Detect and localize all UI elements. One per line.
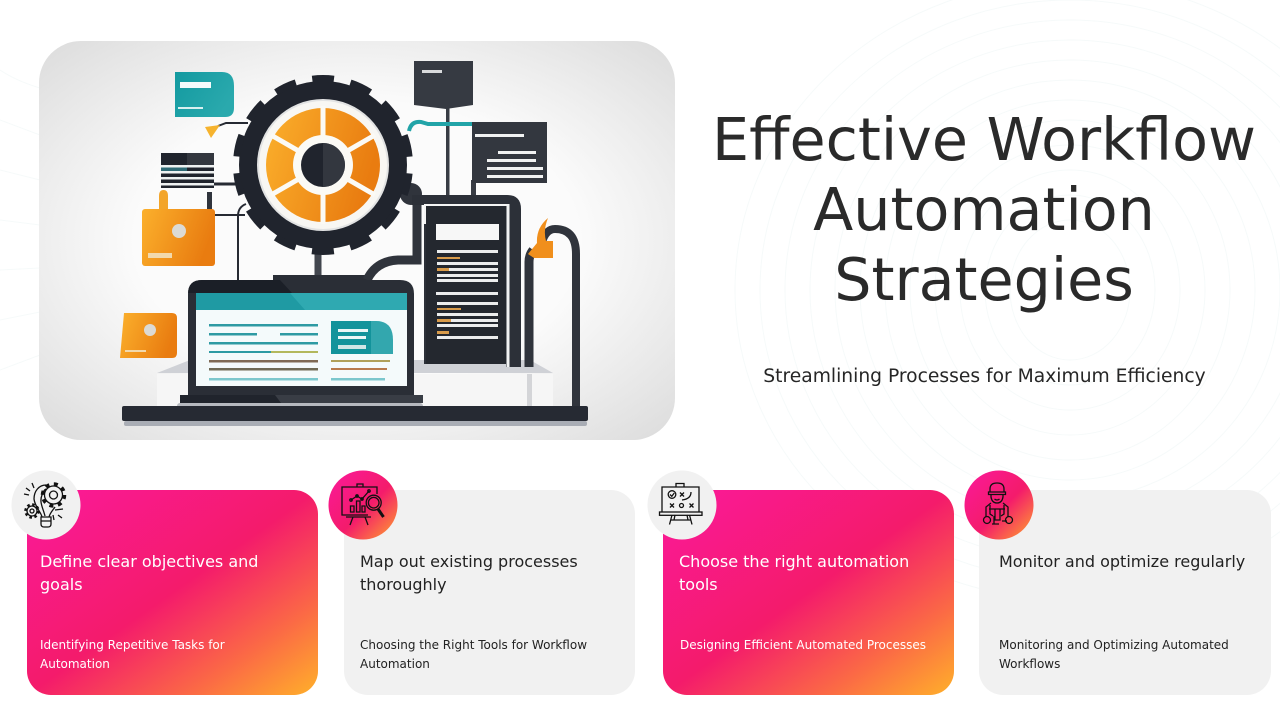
title: Automation — [813, 176, 1155, 244]
description — [360, 638, 587, 671]
dark document with stem — [414, 61, 473, 197]
right pipe with orange valve — [528, 218, 576, 406]
description: Identifying Repetitive Tasks for — [40, 638, 225, 652]
description: Automation — [360, 657, 430, 671]
icon: small orange card — [120, 313, 177, 358]
heading: Map out existing processes — [360, 552, 578, 571]
description — [40, 638, 225, 671]
icon: teal message card — [175, 72, 234, 138]
heading: Define clear objectives and — [40, 552, 258, 571]
panel: workflow illustration — [39, 41, 675, 440]
description: Monitoring and Optimizing Automated — [999, 638, 1229, 652]
icon: presentation board with magnifier — [328, 470, 398, 540]
heading: goals — [40, 575, 83, 594]
title: Strategies — [834, 246, 1134, 314]
icon: lightbulb with gears — [12, 470, 80, 540]
heading — [360, 552, 578, 594]
icon: strategy easel — [648, 470, 716, 540]
server tower — [412, 195, 521, 367]
panel: card 2 — [328, 470, 635, 695]
heading: thoroughly — [360, 575, 447, 594]
connector lines — [207, 123, 422, 283]
description — [999, 638, 1229, 671]
title — [712, 106, 1256, 314]
heading: Choose the right automation — [679, 552, 909, 571]
heading — [679, 552, 909, 594]
panel: card 3 — [648, 470, 954, 695]
icon: construction worker — [964, 470, 1034, 540]
platform — [157, 360, 553, 407]
dark document with text lines — [471, 122, 547, 196]
description: Workflows — [999, 657, 1060, 671]
description: Designing Efficient Automated Processes — [680, 638, 926, 652]
description: Choosing the Right Tools for Workflow — [360, 638, 587, 652]
desk — [122, 406, 588, 426]
laptop — [177, 280, 423, 409]
panel: card 4 — [964, 470, 1271, 695]
title: Effective Workflow — [712, 106, 1256, 174]
subtitle: Streamlining Processes for Maximum Efficiency — [763, 366, 1206, 387]
panel: card 1 — [12, 470, 318, 695]
heading — [40, 552, 258, 594]
icon: orange lock tag — [142, 190, 215, 266]
description: Automation — [40, 657, 110, 671]
teal connector — [409, 122, 474, 131]
heading: Monitor and optimize regularly — [999, 552, 1245, 571]
gear — [236, 78, 410, 252]
heading: tools — [679, 575, 718, 594]
icon: striped list block — [161, 153, 214, 188]
